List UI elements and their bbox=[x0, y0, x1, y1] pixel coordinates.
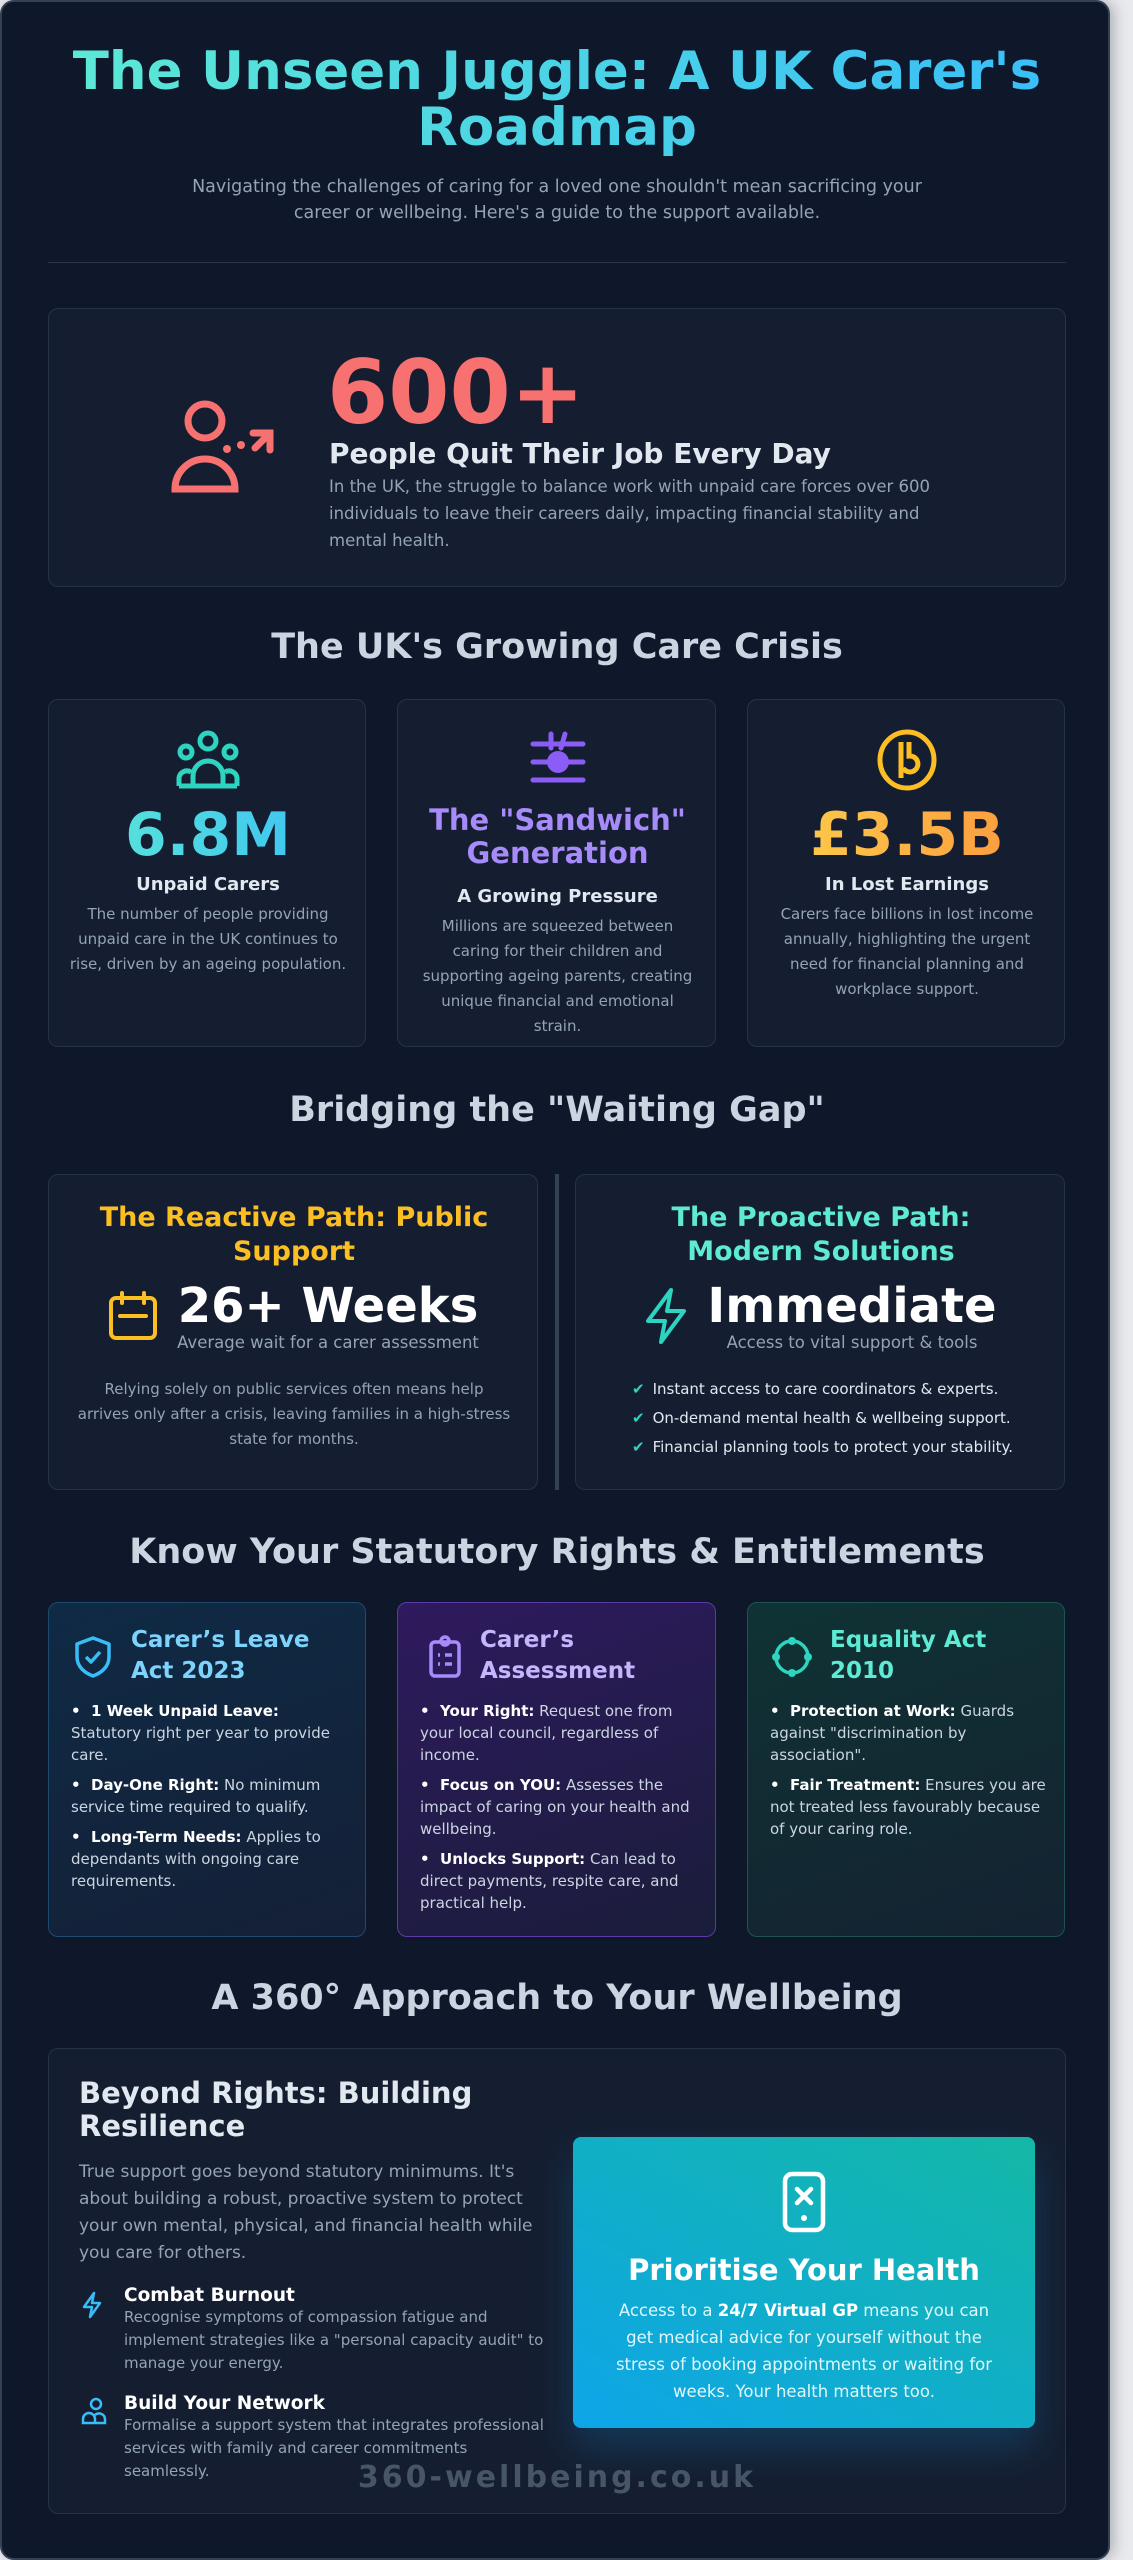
panel: equality act: 2010 bbox=[830, 1658, 894, 1684]
panel: reactive path: state for months. bbox=[229, 1430, 359, 1448]
icon: lightning bbox=[646, 1288, 686, 1344]
checklist: ✔ Financial planning tools to protect your stability. bbox=[632, 1438, 1013, 1456]
stat: immediate: Access to vital support & tools bbox=[727, 1333, 977, 1352]
panel: equality act: • Protection at Work: Guards against "discrimination by association". bbox=[770, 1702, 1014, 1764]
panel: carer's assessment bbox=[397, 1602, 716, 1937]
item: combat burnout bbox=[82, 2285, 543, 2372]
icon: bolt bbox=[82, 2292, 102, 2318]
panel: sandwich generation: Millions are squeezed between caring for their children and supporting ageing parents, creating unique financial and emotional strain. bbox=[423, 917, 692, 1035]
icon: coin bbox=[878, 730, 936, 790]
heading: rights: Know Your Statutory Rights & Entitlements bbox=[129, 1532, 985, 1572]
item: build network: Build Your Network bbox=[124, 2393, 325, 2414]
icon: sandwich bbox=[530, 732, 586, 782]
heading: waiting gap: Bridging the "Waiting Gap" bbox=[289, 1090, 825, 1130]
icon: circle target bbox=[772, 1637, 812, 1677]
checklist: ✔ On-demand mental health & wellbeing support. bbox=[632, 1409, 1011, 1427]
panel: building resilience bbox=[48, 2048, 1066, 2514]
item: combat burnout: Recognise symptoms of compassion fatigue and implement strategies like a "personal capacity audit" to manage your energy. bbox=[124, 2308, 543, 2372]
panel: building resilience: True support goes beyond statutory minimums. It's about building a robust, proactive system to protect your own mental, physical, and financial health while you care for others. bbox=[79, 2162, 532, 2263]
panel: carer's assessment: Carer’s bbox=[480, 1627, 574, 1653]
item: combat burnout: Combat Burnout bbox=[124, 2285, 295, 2306]
checklist bbox=[632, 1380, 1013, 1456]
panel: carer's assessment: • Focus on YOU: Assesses the impact of caring on your health and wellbeing. bbox=[420, 1776, 690, 1838]
panel: unpaid carers: Unpaid Carers bbox=[136, 874, 280, 895]
item: build network bbox=[82, 2393, 544, 2480]
icon: people bbox=[82, 2398, 106, 2424]
stat description: In the UK, the struggle to balance work with unpaid care forces over 600 individuals to leave their careers daily, impacting financial stability and mental health. bbox=[329, 477, 930, 550]
stat: 26+ weeks: Average wait for a carer assessment bbox=[177, 1333, 479, 1352]
callout: prioritise your health bbox=[573, 2137, 1035, 2428]
panel: 600+ hero bbox=[48, 308, 1066, 587]
callout: prioritise your health: Prioritise Your Health bbox=[628, 2253, 980, 2287]
panel: carer's leave act bbox=[48, 1602, 366, 1937]
panel: sandwich generation: The "Sandwich" Generation bbox=[429, 803, 686, 870]
icon: person leaving bbox=[172, 400, 274, 492]
stat 6.8M bbox=[49, 800, 367, 870]
panel: carer's leave act: • Long-Term Needs: Applies to dependants with ongoing care requirements. bbox=[71, 1828, 321, 1890]
panel: building resilience: Beyond Rights: Building bbox=[79, 2076, 472, 2110]
stat 6.8M: 6.8M bbox=[125, 800, 291, 870]
panel: carer's leave act: • Day-One Right: No minimum service time required to qualify. bbox=[71, 1776, 320, 1816]
panel: building resilience: Resilience bbox=[79, 2109, 245, 2143]
panel: lost earnings bbox=[747, 699, 1065, 1047]
item: build network: Formalise a support system that integrates professional services with family and career commitments seamlessly. bbox=[124, 2416, 544, 2480]
stat: immediate bbox=[646, 1278, 997, 1352]
icon: clipboard bbox=[429, 1635, 461, 1678]
icon: group bbox=[176, 730, 240, 788]
panel: carer's assessment: • Unlocks Support: Can lead to direct payments, respite care, and practical help. bbox=[420, 1850, 679, 1912]
panel: carer's leave act: • 1 Week Unpaid Leave: Statutory right per year to provide care. bbox=[71, 1702, 330, 1764]
stat: immediate: Immediate bbox=[707, 1278, 997, 1334]
panel: unpaid carers bbox=[48, 699, 366, 1047]
panel: carer's leave act: Carer’s Leave bbox=[131, 1627, 309, 1653]
icon: shield bbox=[75, 1636, 111, 1678]
panel: equality act bbox=[747, 1602, 1065, 1937]
title: The Unseen Juggle: A UK Carer's Roadmap bbox=[73, 41, 1041, 158]
panel: reactive path: Relying solely on public services often means help bbox=[104, 1380, 483, 1398]
panel: proactive path: The Proactive Path: Modern Solutions bbox=[672, 1202, 970, 1267]
panel: carer's assessment: Assessment bbox=[480, 1658, 635, 1684]
panel: reactive path: The Reactive Path: Public Support bbox=[100, 1202, 488, 1267]
subtitle: Navigating the challenges of caring for a loved one shouldn't mean sacrificing your career or wellbeing. Here's a guide to the support available. bbox=[192, 177, 922, 223]
stat label: People Quit Their Job Every Day bbox=[329, 437, 831, 470]
panel: carer's leave act: Act 2023 bbox=[131, 1658, 245, 1684]
panel: equality act: Equality Act bbox=[830, 1627, 986, 1653]
panel: carer's assessment: • Your Right: Request one from your local council, regardless of income. bbox=[420, 1702, 672, 1764]
panel: reactive path: arrives only after a crisis, leaving families in a high-stress bbox=[78, 1405, 510, 1423]
icon: phone bbox=[782, 2172, 826, 2232]
panel: proactive path bbox=[575, 1174, 1065, 1490]
stat £3.5B bbox=[748, 800, 1066, 870]
panel: unpaid carers: The number of people providing unpaid care in the UK continues to rise, driven by an ageing population. bbox=[70, 905, 346, 973]
panel: lost earnings: In Lost Earnings bbox=[825, 874, 989, 895]
stat 600+: 600+ bbox=[327, 341, 584, 444]
panel: equality act: • Fair Treatment: Ensures you are not treated less favourably because of your caring role. bbox=[770, 1776, 1046, 1838]
stat: 26+ weeks: 26+ Weeks bbox=[178, 1278, 478, 1334]
stat: 26+ weeks bbox=[109, 1278, 479, 1352]
panel: sandwich generation: A Growing Pressure bbox=[457, 886, 658, 907]
checklist: ✔ Instant access to care coordinators & experts. bbox=[632, 1380, 998, 1398]
icon: calendar bbox=[109, 1291, 157, 1340]
panel: reactive path bbox=[48, 1174, 538, 1490]
stat £3.5B: £3.5B bbox=[810, 800, 1004, 870]
panel: lost earnings: Carers face billions in lost income annually, highlighting the urgent need for financial planning and workplace support. bbox=[781, 905, 1033, 998]
panel: sandwich generation bbox=[397, 699, 716, 1047]
heading: care crisis: The UK's Growing Care Crisis bbox=[271, 627, 843, 667]
heading: 360 wellbeing: A 360° Approach to Your Wellbeing bbox=[211, 1978, 903, 2018]
footer: website: 360-wellbeing.co.uk bbox=[358, 2460, 756, 2495]
callout: prioritise your health: Access to a 24/7 Virtual GP means you can get medical advice for yourself without the stress of booking appointments or waiting for weeks. Your health matters too. bbox=[616, 2301, 992, 2401]
